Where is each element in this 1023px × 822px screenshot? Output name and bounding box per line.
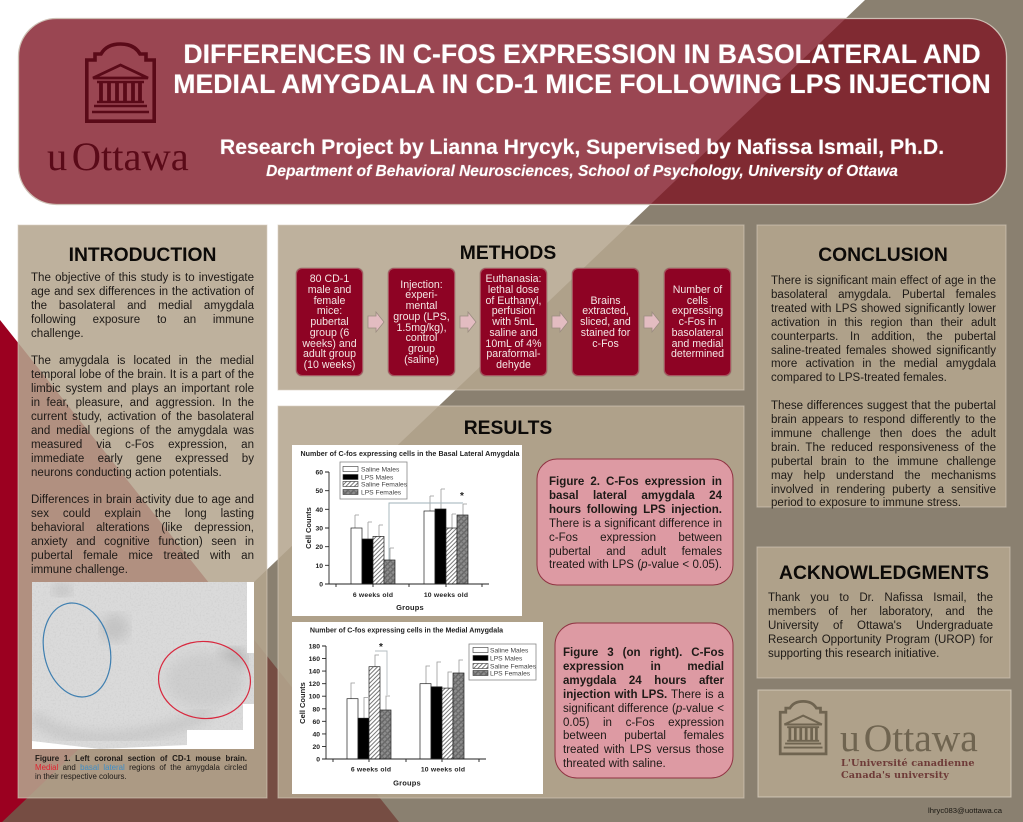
text: conclusion: activation in this region than their adult — [771, 317, 996, 329]
basal lateral region circle — [35, 597, 119, 703]
flow step 2: group (LPS, — [393, 311, 450, 323]
text: introduction: The objective of this study is to investigate — [31, 272, 254, 284]
text: introduction: measured via c-Fos expression, an — [31, 439, 254, 451]
legend: chart 1: Saline Females — [361, 482, 408, 488]
bar chart: medial amygdala: Cell Counts — [298, 682, 307, 724]
medial region circle — [155, 638, 254, 722]
text: introduction: The amygdala is located in the medial — [31, 355, 254, 367]
callout text: figure 2: Figure 2. C-Fos expression in — [549, 476, 722, 488]
bar chart: basal lateral amygdala: Cell Counts — [304, 507, 313, 549]
callout text: figure 3: between pubertal females — [563, 730, 724, 742]
legend: chart 2: Saline Males — [490, 648, 529, 654]
callout panel: figure 2 — [537, 459, 733, 585]
bar chart: medial amygdala — [292, 622, 543, 794]
flow step 5: basolateral — [672, 327, 723, 339]
text: conclusion: These differences suggest that the pubertal — [771, 400, 996, 412]
text: introduction: behavioral alterations (like depression, — [31, 522, 254, 534]
flow step 4: stained for — [581, 327, 630, 339]
flow step 2: experi- — [405, 289, 438, 301]
legend: chart 1: Saline Males — [361, 466, 400, 474]
bar chart: medial amygdala: 180 — [309, 644, 320, 650]
text: acknowledgments: members of her laboratory, and the — [768, 606, 993, 618]
text: acknowledgments — [768, 592, 993, 660]
flow step 5: Number of — [673, 284, 722, 296]
bar chart: basal lateral amygdala: 40 — [315, 507, 323, 514]
title — [173, 38, 991, 99]
bar chart: basal lateral amygdala: * — [460, 491, 464, 502]
text: introduction: following exposure to an immune — [31, 314, 254, 326]
callout text: figure 3: 0.05) in c-Fos expression — [563, 717, 724, 729]
legend: chart 1: LPS Females — [361, 490, 402, 496]
callout text: figure 3 — [563, 647, 724, 770]
arrow 2 — [460, 312, 476, 332]
flow step 3: of Euthanyl, — [486, 295, 541, 307]
contact email: lhryc083@uottawa.ca — [928, 806, 1002, 815]
university tagline — [841, 758, 975, 780]
text: conclusion: involved in rendering puberty a sensitive — [771, 484, 996, 496]
bar chart: medial amygdala: 100 — [309, 694, 320, 701]
text: conclusion — [771, 275, 996, 509]
bar chart: medial amygdala: 20 — [312, 744, 320, 751]
text: introduction: immune challenge. — [31, 564, 128, 576]
flow step 1: female — [314, 295, 345, 307]
text: introduction: pubertal female mice treated with an — [31, 550, 254, 562]
panel: logo — [758, 690, 1011, 797]
bar chart: basal lateral amygdala: 20 — [315, 544, 323, 551]
callout text: figure 3: injection with LPS. There is a — [563, 689, 724, 701]
heading: introduction: INTRODUCTION — [69, 245, 216, 266]
text: conclusion: treated with LPS showed significantly lower — [771, 303, 996, 315]
flow step 3: with 5mL — [492, 316, 535, 328]
flow step 2: group — [408, 343, 435, 355]
panel: results — [278, 406, 744, 798]
text: conclusion: counterparts. In addition, the pubertal — [771, 331, 996, 343]
flow step 5: expressing — [672, 305, 723, 317]
callout text: figure 2: c-Fos expression between — [549, 532, 722, 544]
flow step 3: 10mL of 4% — [485, 338, 542, 350]
flow step 2: mental — [406, 300, 437, 312]
flow step 1: pubertal — [310, 316, 349, 328]
bar chart: basal lateral amygdala: 0 — [319, 582, 323, 588]
text: conclusion: period to exposure to immune stress. — [771, 497, 961, 509]
text: introduction: Differences in brain activity due to age and — [31, 494, 254, 506]
callout text: figure 3: significant difference (p-value < — [563, 703, 724, 715]
flow step 2: control — [406, 332, 437, 344]
arrow 1 — [368, 312, 384, 332]
callout text: figure 2: pubertal and adult females — [549, 546, 722, 558]
flow step 3: saline and — [489, 327, 538, 339]
legend: chart 2 — [469, 644, 537, 680]
heading: results: RESULTS — [464, 418, 552, 439]
bar chart: medial amygdala: Number of C-fos expressing cells in the Medial Amygdala — [310, 626, 503, 634]
panel: methods — [278, 225, 744, 390]
university tagline: L'Université canadienne — [841, 758, 975, 769]
title: MEDIAL AMYGDALA IN CD-1 MICE FOLLOWING LPS INJECTION — [173, 69, 991, 99]
flow step 2: (saline) — [404, 354, 439, 366]
figure 1 caption: Medial and basal lateral regions of the amygdala circled — [35, 763, 247, 772]
text: conclusion: pubertal brain to the immune challenge — [771, 456, 996, 468]
university tagline: Canada's university — [841, 770, 949, 780]
bar chart: basal lateral amygdala: 50 — [315, 488, 323, 495]
text: acknowledgments: Thank you to Dr. Nafissa Ismail, the — [768, 592, 993, 604]
uOttawa wordmark footer: uOttawa — [840, 716, 978, 760]
flow step 1: weeks) and — [302, 338, 357, 350]
panel: introduction — [18, 225, 267, 798]
text: introduction — [31, 272, 254, 576]
flow step 5: cells — [687, 295, 708, 307]
bar chart: medial amygdala: 160 — [309, 656, 320, 663]
callout text: figure 3: expression in medial — [563, 661, 724, 673]
legend: chart 2: LPS Males — [490, 656, 523, 662]
flow step 2: Injection: — [400, 278, 443, 290]
callout text: figure 2 — [549, 476, 722, 571]
text: introduction: anxiety and cognitive function) seen in — [31, 536, 254, 548]
text: conclusion: basolateral amygdala. Pubertal females — [771, 289, 996, 301]
flow step 4: extracted, — [582, 305, 629, 317]
text: acknowledgments: University of Ottawa's Undergraduate — [768, 620, 993, 632]
bar chart: basal lateral amygdala: Number of C-fos expressing cells in the Basal Lateral Amygdala — [300, 450, 520, 458]
heading: acknowledgments: ACKNOWLEDGMENTS — [779, 563, 989, 584]
bar chart: medial amygdala: * — [379, 642, 383, 653]
bar chart: basal lateral amygdala: 10 — [315, 563, 323, 570]
bar chart: medial amygdala: Groups — [393, 778, 421, 788]
callout text: figure 3: amygdala 24 hours after — [563, 675, 724, 687]
legend: chart 1: LPS Males — [361, 474, 394, 482]
bar chart: medial amygdala: 0 — [316, 756, 320, 764]
bar chart: medial amygdala: 140 — [309, 669, 320, 676]
flow step 3: perfusion — [492, 305, 535, 317]
bar chart: basal lateral amygdala: 60 — [315, 470, 323, 476]
callout panel: figure 3 — [555, 623, 733, 778]
callout text: figure 3: threated with saline. — [563, 758, 666, 770]
text: acknowledgments: Research Opportunity Program (UROP) for — [768, 634, 993, 646]
bar chart: medial amygdala: 120 — [309, 681, 320, 688]
flow step 5: determined — [671, 348, 724, 360]
heading: methods: METHODS — [460, 243, 556, 264]
text: introduction: temporal lobe of the brain. It is a part of the — [31, 369, 254, 381]
figure 1 caption: in their respective colours. — [35, 772, 127, 781]
text: conclusion: may help understand the mechanisms — [771, 470, 996, 482]
flow step 1: 80 CD-1 — [310, 273, 349, 285]
arrow 4 — [644, 312, 660, 332]
flow step 2: 1.5mg/kg), — [396, 322, 447, 334]
flow step 3: lethal dose — [488, 284, 539, 296]
text: introduction: current study, activation of the basolateral — [31, 411, 254, 423]
legend: chart 2: Saline Females — [490, 664, 537, 670]
callout text: figure 3: treated with LPS versus those — [563, 744, 724, 756]
text: introduction: age and sex differences in the activation of — [31, 286, 254, 298]
text: conclusion: compared to LPS-treated females. — [771, 372, 947, 384]
bar chart: medial amygdala: 6 weeks old — [351, 766, 391, 774]
text: introduction: in fear, pleasure, and aggression. In the — [31, 397, 254, 409]
text: introduction: neurons conducting action potentials. — [31, 467, 222, 479]
text: introduction: the basolateral and medial amygdala — [31, 300, 254, 312]
bar chart: basal lateral amygdala: Groups — [396, 603, 424, 612]
callout text: figure 3: Figure 3 (on right). C-Fos — [563, 647, 724, 659]
text: conclusion: immune challenge then does the adult — [771, 428, 996, 440]
flow step 2 — [388, 268, 455, 376]
text: conclusion: There is significant main effect of age in the — [771, 275, 996, 287]
figure 1: brain section micrograph — [32, 582, 254, 749]
bar chart: medial amygdala: 60 — [312, 719, 320, 726]
legend: chart 1 — [340, 462, 408, 499]
text: conclusion: brain. The reduced responsiveness of the — [771, 442, 996, 454]
text: introduction: challenge. — [31, 328, 84, 340]
flow step 4: sliced, and — [580, 316, 631, 328]
flow step 1 — [296, 268, 363, 376]
flow step 1: adult group — [303, 348, 356, 360]
text: introduction: and medial regions of the amygdala was — [31, 425, 254, 437]
text: introduction: limbic system and plays an important role — [31, 383, 254, 395]
flow step 1: male and — [308, 284, 351, 296]
flow step 5: and medial — [672, 338, 723, 350]
header banner — [18, 18, 1006, 204]
title: DIFFERENCES IN C-FOS EXPRESSION IN BASOLATERAL AND — [183, 38, 981, 68]
uOttawa wordmark header: uOttawa — [47, 134, 189, 179]
icon: uOttawa crest header — [87, 44, 154, 121]
flow step 4: c-Fos — [592, 338, 619, 350]
bar chart: basal lateral amygdala: 6 weeks old — [353, 592, 393, 599]
text: conclusion: brain appears to respond differently to the — [771, 414, 996, 426]
flow step 3: Euthanasia: — [486, 273, 541, 285]
text: introduction: sex could explain the long lasting — [31, 508, 254, 520]
flow step 3: paraformal- — [486, 348, 541, 360]
bar chart: basal lateral amygdala: 30 — [315, 526, 323, 532]
bar chart: medial amygdala: 40 — [312, 731, 320, 738]
flow step 3 — [480, 268, 547, 376]
flow step 1: mice: — [317, 305, 342, 317]
figure 1 caption — [35, 754, 247, 781]
callout text: figure 2: hours following LPS injection. — [549, 504, 722, 516]
bar chart: basal lateral amygdala: 10 weeks old — [424, 592, 468, 599]
callout text: figure 2: There is a significant difference in — [549, 518, 722, 530]
flow step 4 — [572, 268, 639, 376]
callout text: figure 2: basal lateral amygdala 24 — [549, 490, 722, 502]
text: acknowledgments: supporting this research initiative. — [768, 648, 939, 660]
panel: conclusion — [757, 225, 1006, 507]
text: conclusion: saline-treated females showed significantly — [771, 345, 996, 357]
arrow 3 — [552, 312, 568, 332]
bar chart: medial amygdala: 10 weeks old — [421, 766, 465, 774]
flow step 5: c-Fos in — [679, 316, 716, 328]
heading: conclusion: CONCLUSION — [818, 245, 948, 266]
text: introduction: immediate early gene expressed by — [31, 453, 254, 465]
flow step 4: Brains — [590, 295, 621, 307]
callout text: figure 2: treated with LPS (p-value < 0.05). — [549, 559, 722, 571]
text: conclusion: more activation in the medial amygdala — [771, 358, 996, 370]
subtitle: department: Department of Behavioral Neurosciences, School of Psychology, University of Ottawa — [266, 162, 898, 180]
flow step 3: dehyde — [496, 359, 531, 371]
subtitle: author: Research Project by Lianna Hrycyk, Supervised by Nafissa Ismail, Ph.D. — [220, 136, 944, 158]
icon: uOttawa crest footer — [780, 701, 826, 754]
panel: acknowledgments — [757, 547, 1010, 678]
bar chart: basal lateral amygdala — [292, 445, 522, 616]
figure 1 caption: Figure 1. Left coronal section of CD-1 mouse brain. — [35, 754, 247, 763]
legend: chart 2: LPS Females — [490, 670, 531, 678]
flow step 1: (10 weeks) — [304, 359, 355, 371]
bar chart: medial amygdala: 80 — [312, 706, 320, 713]
flow step 1: group (6 — [310, 327, 349, 339]
flow step 5 — [664, 268, 731, 376]
